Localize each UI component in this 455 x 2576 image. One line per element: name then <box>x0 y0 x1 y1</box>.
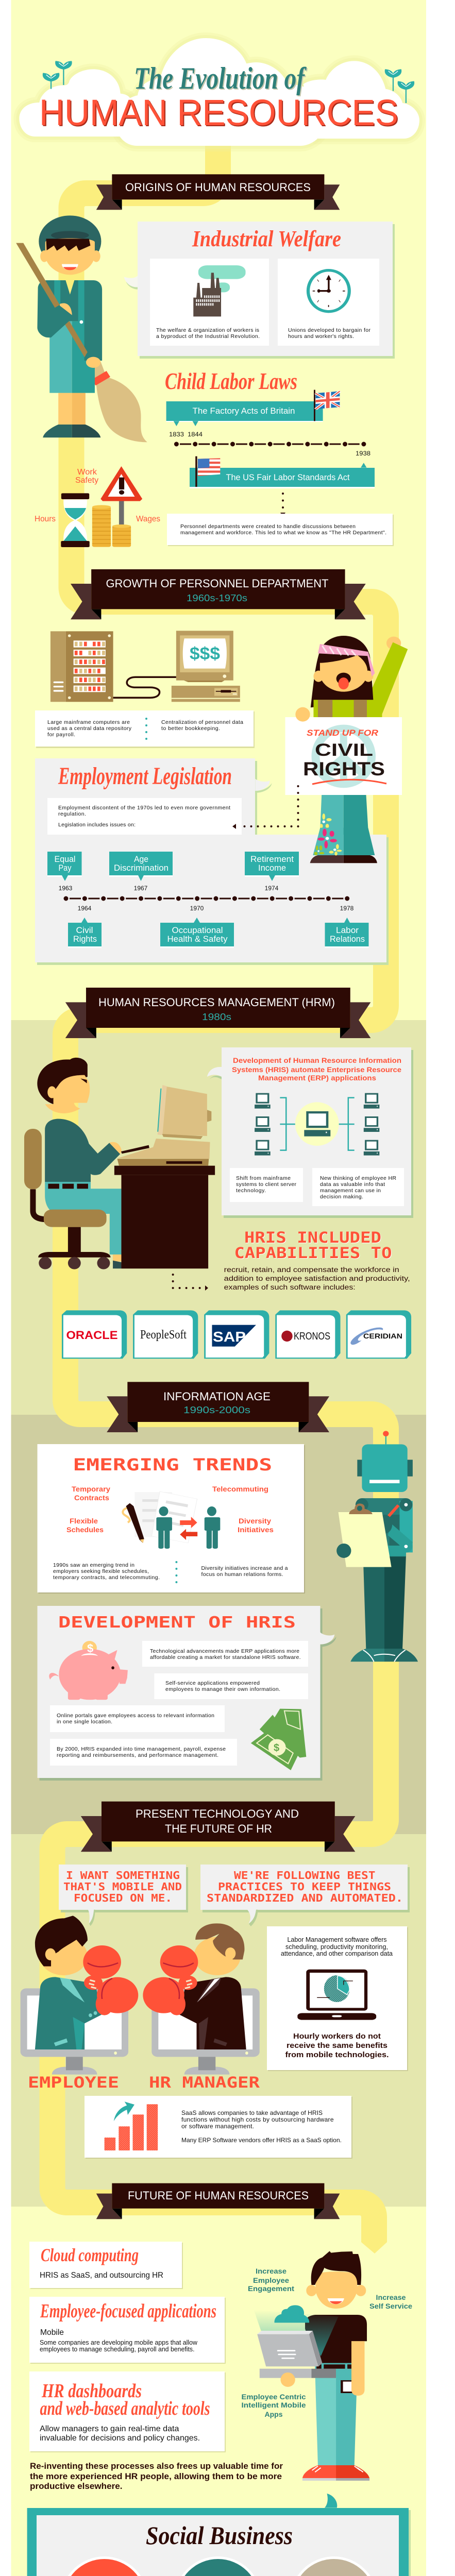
panel: development of HRIS systems: systems to client server <box>236 1181 297 1188</box>
logo: Ceridian: CERIDIAN <box>363 1332 402 1340</box>
heading: child labor laws: Child Labor Laws <box>165 368 297 394</box>
icons: work safety, hours and wages: Work <box>77 468 97 477</box>
icons: work safety, hours and wages: Hours <box>35 515 56 523</box>
panel: SaaS: or software management. <box>181 2123 254 2130</box>
icon: desktop computer with $$$: $$$ <box>190 644 220 664</box>
speech bubble: HR manager: STANDARDIZED AND AUTOMATED. <box>207 1892 403 1904</box>
suit: HR manager <box>179 1977 246 2049</box>
legislation boxes above timeline: Equal <box>55 854 75 864</box>
notes: HRIS developments: Online portals gave employees access to relevant information <box>57 1713 214 1719</box>
banner: growth of personnel department: 1960s-1970s <box>187 593 247 603</box>
head: HR manager <box>194 1923 244 1975</box>
labels: employee benefits: Employee Centric <box>241 2393 306 2401</box>
panel: emerging trends: Flexible <box>70 1517 98 1525</box>
timeline years 1833 to 1938: 1833 <box>169 431 184 438</box>
legislation boxes below timeline: Civil <box>76 925 93 935</box>
suit: employee <box>35 1977 102 2049</box>
bar chart with rising arrow <box>105 2102 158 2150</box>
speech bubble: employee <box>59 1865 188 1926</box>
panel: emerging trends: Diversity <box>239 1517 271 1525</box>
label: HR manager: HR MANAGER <box>149 2074 260 2091</box>
icon: money <box>251 1709 306 1770</box>
sign: stand up for civil rights: RIGHTS <box>303 758 385 779</box>
heading: development of HRIS: DEVELOPMENT OF HRIS <box>58 1614 296 1632</box>
logo: Oracle: ORACLE <box>66 1329 117 1342</box>
timeline years 1833 to 1938: 1938 <box>356 450 370 457</box>
panel: industrial welfare: a byproduct of the Industrial Revolution. <box>156 333 260 340</box>
notes: HRIS developments: affordable creating a market for standalone HRIS software. <box>150 1654 301 1660</box>
labels: employee benefits: Employee <box>253 2276 289 2284</box>
title: The Evolution of: The Evolution of <box>134 61 307 95</box>
text: HRIS capabilities: examples of such software includes: <box>224 1283 356 1291</box>
monitor: HR manager <box>151 1988 260 2075</box>
timeline banner: factory acts of britain <box>166 390 340 426</box>
panel: labor management: scheduling, productivity monitoring, <box>285 1943 388 1951</box>
text: HRIS capabilities: recruit, retain, and compensate the workforce in <box>224 1266 399 1274</box>
panel: emerging trends: 1990s saw an emerging trend in <box>53 1562 134 1568</box>
legislation boxes below timeline: Health & Safety <box>167 934 228 944</box>
legislation boxes above timeline <box>47 852 299 881</box>
panel: SaaS <box>85 2096 352 2159</box>
panel: mainframe notes: Centralization of personnel data <box>161 719 243 725</box>
icon: warning sign <box>100 466 142 524</box>
panel: labor management: attendance, and other comparison data <box>281 1950 393 1957</box>
panel: HR dashboards: HR dashboards <box>41 2380 142 2402</box>
banner: human resources management: HUMAN RESOURCES MANAGEMENT (HRM) <box>98 996 335 1009</box>
sign: stand up for civil rights <box>285 707 402 795</box>
boxing gloves <box>83 1945 198 2015</box>
circle: workforce productivity <box>174 2556 262 2576</box>
panel: SaaS: SaaS allows companies to take advantage of HRIS <box>181 2109 323 2116</box>
panel: emerging trends: employers seeking flexible schedules, <box>53 1568 149 1574</box>
panel: industrial welfare: hours and worker's rights. <box>288 333 354 340</box>
speech bubble: HR manager: WE'RE FOLLOWING BEST <box>234 1869 375 1882</box>
legislation boxes below timeline <box>68 918 369 948</box>
panel: development of HRIS systems: Development of Human Resource Information <box>233 1056 401 1064</box>
icon: piggy bank <box>49 1641 128 1700</box>
panel: emerging trends: focus on human relations forms. <box>201 1571 283 1578</box>
notes: HRIS developments: Technological advancements made ERP applications more <box>150 1648 299 1654</box>
dotted arrow to personnel note <box>280 494 285 516</box>
notes: HRIS developments: in one single location. <box>57 1719 112 1725</box>
panel: cloud computing: HRIS as SaaS, and outsourcing HR <box>40 2271 163 2280</box>
panel: social business <box>27 2494 411 2576</box>
icon: laptop with pie chart <box>297 1970 376 2020</box>
panel: mainframe notes: used as a central data repository <box>47 725 132 732</box>
legislation boxes above timeline: Income <box>258 863 286 873</box>
panel: labor management: receive the same benefits <box>287 2041 387 2050</box>
heading: HRIS included capabilities to: CAPABILITIES TO <box>234 1244 392 1262</box>
legislation timeline 1963 to 1978: 1974 <box>265 885 279 892</box>
panel: emerging trends <box>37 1444 305 1594</box>
panel: employee-focused applications: Mobile <box>40 2328 64 2337</box>
speech bubble: employee: THAT'S MOBILE AND <box>63 1880 182 1893</box>
closing paragraph: the more experienced HR people, allowing them to be more <box>30 2471 282 2481</box>
legislation timeline 1963 to 1978: 1964 <box>78 905 92 912</box>
banner: human resources management <box>65 988 370 1038</box>
banner: origins of human resources: ORIGINS OF HUMAN RESOURCES <box>125 181 311 194</box>
text: HRIS capabilities: addition to employee satisfaction and productivity, <box>224 1275 410 1282</box>
protester legs over panel <box>310 828 377 863</box>
figure: protester <box>311 636 408 855</box>
notes: HRIS developments: employees to manage their own information. <box>165 1686 280 1692</box>
panel: development of HRIS: $ <box>274 1742 279 1754</box>
panel: emerging trends: Temporary <box>72 1485 110 1493</box>
legislation boxes above timeline: Retirement <box>250 854 294 864</box>
panel: labor management: Labor Management software offers <box>288 1936 386 1943</box>
dotted arrow to HRIS capabilities <box>173 1275 208 1291</box>
title clouds with sprouts <box>19 38 419 146</box>
panel: SaaS: Many ERP Software vendors offer HRIS as a SaaS option. <box>181 2137 342 2144</box>
heading: HRIS included capabilities to: HRIS INCLUDED <box>244 1229 381 1246</box>
timeline banner: factory acts of britain: The Factory Acts of Britain <box>193 406 295 416</box>
panel: cloud computing: Cloud computing <box>41 2245 139 2265</box>
monitor: employee <box>21 1988 128 2075</box>
panel: development of HRIS systems: Shift from mainframe <box>236 1175 291 1181</box>
label: employee: EMPLOYEE <box>28 2074 119 2091</box>
icon: mainframe computer <box>50 631 176 702</box>
logo: Kronos: KRONOS <box>294 1331 330 1342</box>
notes: HRIS developments <box>50 1641 308 1766</box>
heading: emerging trends: EMERGING TRENDS <box>73 1455 272 1475</box>
panel: employee-focused applications: Employee-focused applications <box>40 2300 216 2322</box>
panel: HR dashboards: invaluable for decisions and policy changes. <box>40 2434 200 2443</box>
icon: piggy bank: $ <box>87 1642 93 1655</box>
timeline years 1833 to 1938: 1844 <box>188 431 203 438</box>
panel: labor management: from mobile technologies. <box>285 2050 389 2059</box>
panel: employee-focused applications: employees to manage scheduling, payroll and benefits. <box>40 2345 195 2353</box>
notes: HRIS developments: By 2000, HRIS expanded into time management, payroll, expense <box>57 1746 226 1752</box>
legislation boxes above timeline: Pay <box>59 863 72 873</box>
banner: growth of personnel department: GROWTH OF PERSONNEL DEPARTMENT <box>106 577 329 590</box>
panel: emerging trends: Initiatives <box>238 1526 274 1534</box>
panel: mainframe notes: Large mainframe computers are <box>47 719 130 725</box>
legislation timeline 1963 to 1978 <box>59 885 354 912</box>
labels: employee benefits: Increase <box>376 2293 406 2301</box>
panel: development of HRIS systems: technology. <box>236 1188 266 1194</box>
icon: clock <box>307 269 351 313</box>
legislation boxes below timeline: Relations <box>330 934 365 944</box>
head: employee <box>35 1916 88 1975</box>
labels: employee benefits <box>241 2267 412 2418</box>
icons: work safety, hours and wages: Safety <box>75 476 98 485</box>
speech bubble: HR manager <box>200 1865 410 1926</box>
banner: future of human resources <box>96 2183 340 2219</box>
dotted arrow from sign to legislation <box>232 786 298 829</box>
panel: mainframe notes: for payroll. <box>47 732 75 738</box>
panel: HR dashboards: and web-based analytic tools <box>40 2398 210 2419</box>
panel: employment legislation: Legislation includes issues on: <box>58 822 136 828</box>
icon: hourglass <box>61 493 90 547</box>
notes: HRIS developments: Self-service applications empowered <box>165 1680 260 1686</box>
timeline banner: US fair labor standards act <box>190 456 375 488</box>
speech bubble: employee: I WANT SOMETHING <box>66 1869 180 1882</box>
panel: industrial welfare <box>124 222 395 359</box>
panel: SaaS: functions without high costs by outsourcing hardware <box>181 2116 334 2123</box>
notes: HRIS developments: reporting and reimbursements, and performance management. <box>57 1752 218 1758</box>
speech bubble: employee: FOCUSED ON ME. <box>74 1892 172 1904</box>
speech bubble: HR manager: PRACTICES TO KEEP THINGS <box>218 1880 391 1893</box>
panel: industrial welfare: The welfare & organization of workers is <box>156 327 259 333</box>
network diagram <box>255 1093 379 1156</box>
icon: coin stacks <box>92 505 131 547</box>
labels: employee benefits: Increase <box>256 2267 287 2275</box>
labels: employee benefits: Intelligent Mobile <box>241 2401 306 2409</box>
panel: personnel departments: Personnel departments were created to handle discussions between <box>180 523 356 530</box>
panel: mainframe notes <box>35 710 255 748</box>
panel: emerging trends: Schedules <box>66 1526 104 1534</box>
figure: man with laptop and cloud <box>254 2251 369 2481</box>
banner: information age: 1990s-2000s <box>183 1405 250 1415</box>
banner: origins of human resources <box>96 174 340 210</box>
panel: labor management: Hourly workers do not <box>293 2032 381 2041</box>
legislation boxes below timeline: Labor <box>336 925 359 935</box>
circle: customer experiences <box>61 2556 148 2576</box>
figures: employee and HR manager boxing from monitors <box>21 1916 260 2075</box>
panel: HR dashboards <box>29 2371 226 2452</box>
panel: employee-focused applications <box>29 2297 226 2364</box>
title: Human Resources: HUMAN RESOURCES <box>39 93 398 133</box>
labels: employee benefits: Engagement <box>248 2284 294 2293</box>
icon: documents, pen and people exchange <box>123 1492 220 1549</box>
timeline banner: US fair labor standards act: The US Fair Labor Standards Act <box>226 472 350 482</box>
panel: development of HRIS systems: decision making. <box>320 1194 363 1200</box>
panel: mainframe notes: to better bookkeeping. <box>161 725 220 732</box>
circle: accelerate innovation <box>290 2556 378 2576</box>
panel: development of HRIS <box>37 1606 336 1781</box>
panel: development of HRIS systems <box>207 1047 413 1218</box>
panel: emerging trends: Telecommuting <box>212 1485 268 1493</box>
banner: human resources management: 1980s <box>202 1012 231 1022</box>
banner: growth of personnel department <box>71 569 366 619</box>
panel: industrial welfare: Unions developed to bargain for <box>288 327 371 333</box>
winding timeline pipe with arrow <box>53 146 387 2253</box>
banner: information age: INFORMATION AGE <box>163 1390 271 1403</box>
panel: employment legislation <box>35 758 389 965</box>
icon: desktop computer with $$$ <box>172 631 240 702</box>
dress upper part of protester <box>313 793 375 855</box>
panel: emerging trends: Contracts <box>74 1494 109 1502</box>
panel: development of HRIS systems: management can use in <box>320 1188 381 1194</box>
panel: employee-focused applications: Some companies are developing mobile apps that allow <box>40 2338 198 2346</box>
icons: work safety, hours and wages: Wages <box>136 515 160 523</box>
heading: HRIS included capabilities to <box>234 1229 392 1262</box>
sign: stand up for civil rights: CIVIL <box>315 740 373 760</box>
legislation boxes above timeline: Discrimination <box>114 863 168 873</box>
sign: stand up for civil rights: STAND UP FOR <box>307 728 379 738</box>
heading: employment legislation: Employment Legislation <box>58 762 232 790</box>
legislation timeline 1963 to 1978: 1967 <box>134 885 148 892</box>
heading: industrial welfare: Industrial Welfare <box>192 226 341 251</box>
legislation boxes below timeline: Occupational <box>172 925 223 935</box>
closing paragraph <box>30 2461 283 2491</box>
panel: development of HRIS systems: data as valuable info that <box>320 1181 385 1188</box>
labels: employee benefits: Apps <box>265 2410 283 2418</box>
icon: factory <box>193 265 246 316</box>
banner: present technology and the future of HR <box>81 1802 355 1852</box>
panel: HR dashboards: Allow managers to gain real-time data <box>40 2425 179 2433</box>
figure: man at computer desk <box>24 1058 215 1269</box>
figure: robot with clipboard <box>336 1431 418 1662</box>
banner: present technology and the future of HR: THE FUTURE OF HR <box>165 1822 272 1835</box>
panel: labor management <box>267 1926 408 2071</box>
labels: employee benefits: Self Service <box>369 2302 412 2310</box>
legislation boxes below timeline: Rights <box>73 934 97 944</box>
figure: woman with broom <box>16 215 147 442</box>
panel: employment legislation: Employment discontent of the 1970s led to even more government <box>58 805 230 811</box>
panel: employment legislation: regulation. <box>58 811 86 817</box>
software logo cards <box>62 1310 411 1359</box>
timeline years 1833 to 1938 <box>169 431 370 457</box>
panel: development of HRIS systems: Management (ERP) applications <box>258 1074 376 1082</box>
banner: present technology and the future of HR: PRESENT TECHNOLOGY AND <box>136 1807 299 1820</box>
legislation timeline 1963 to 1978: 1970 <box>190 905 204 912</box>
legislation timeline 1963 to 1978: 1963 <box>59 885 73 892</box>
logo: SAP: SAP <box>213 1329 246 1345</box>
heading: social business: Social Business <box>146 2521 293 2550</box>
icons: work safety, hours and wages <box>35 466 160 547</box>
legislation boxes above timeline: Age <box>134 854 148 864</box>
banner: information age <box>107 1382 329 1432</box>
panel: cloud computing <box>29 2242 183 2289</box>
panel: development of HRIS systems: Systems (HRIS) automate Enterprise Resource <box>232 1065 401 1074</box>
panel: development of HRIS systems: New thinking of employee HR <box>320 1175 396 1181</box>
panel: personnel departments <box>167 514 394 546</box>
legislation timeline 1963 to 1978: 1978 <box>340 905 354 912</box>
text: HRIS capabilities <box>224 1266 410 1291</box>
panel: personnel departments: management and workforce. This led to what we know as "The HR Department". <box>180 530 386 536</box>
banner: future of human resources: FUTURE OF HUMAN RESOURCES <box>128 2189 309 2202</box>
panel: emerging trends: temporary contracts, and telecommuting. <box>53 1574 160 1581</box>
closing paragraph: Re-inventing these processes also frees up valuable time for <box>30 2461 283 2471</box>
closing paragraph: productive elsewhere. <box>30 2481 123 2491</box>
logo: PeopleSoft: PeopleSoft <box>140 1328 187 1342</box>
panel: emerging trends: Diversity initiatives increase and a <box>201 1565 288 1571</box>
